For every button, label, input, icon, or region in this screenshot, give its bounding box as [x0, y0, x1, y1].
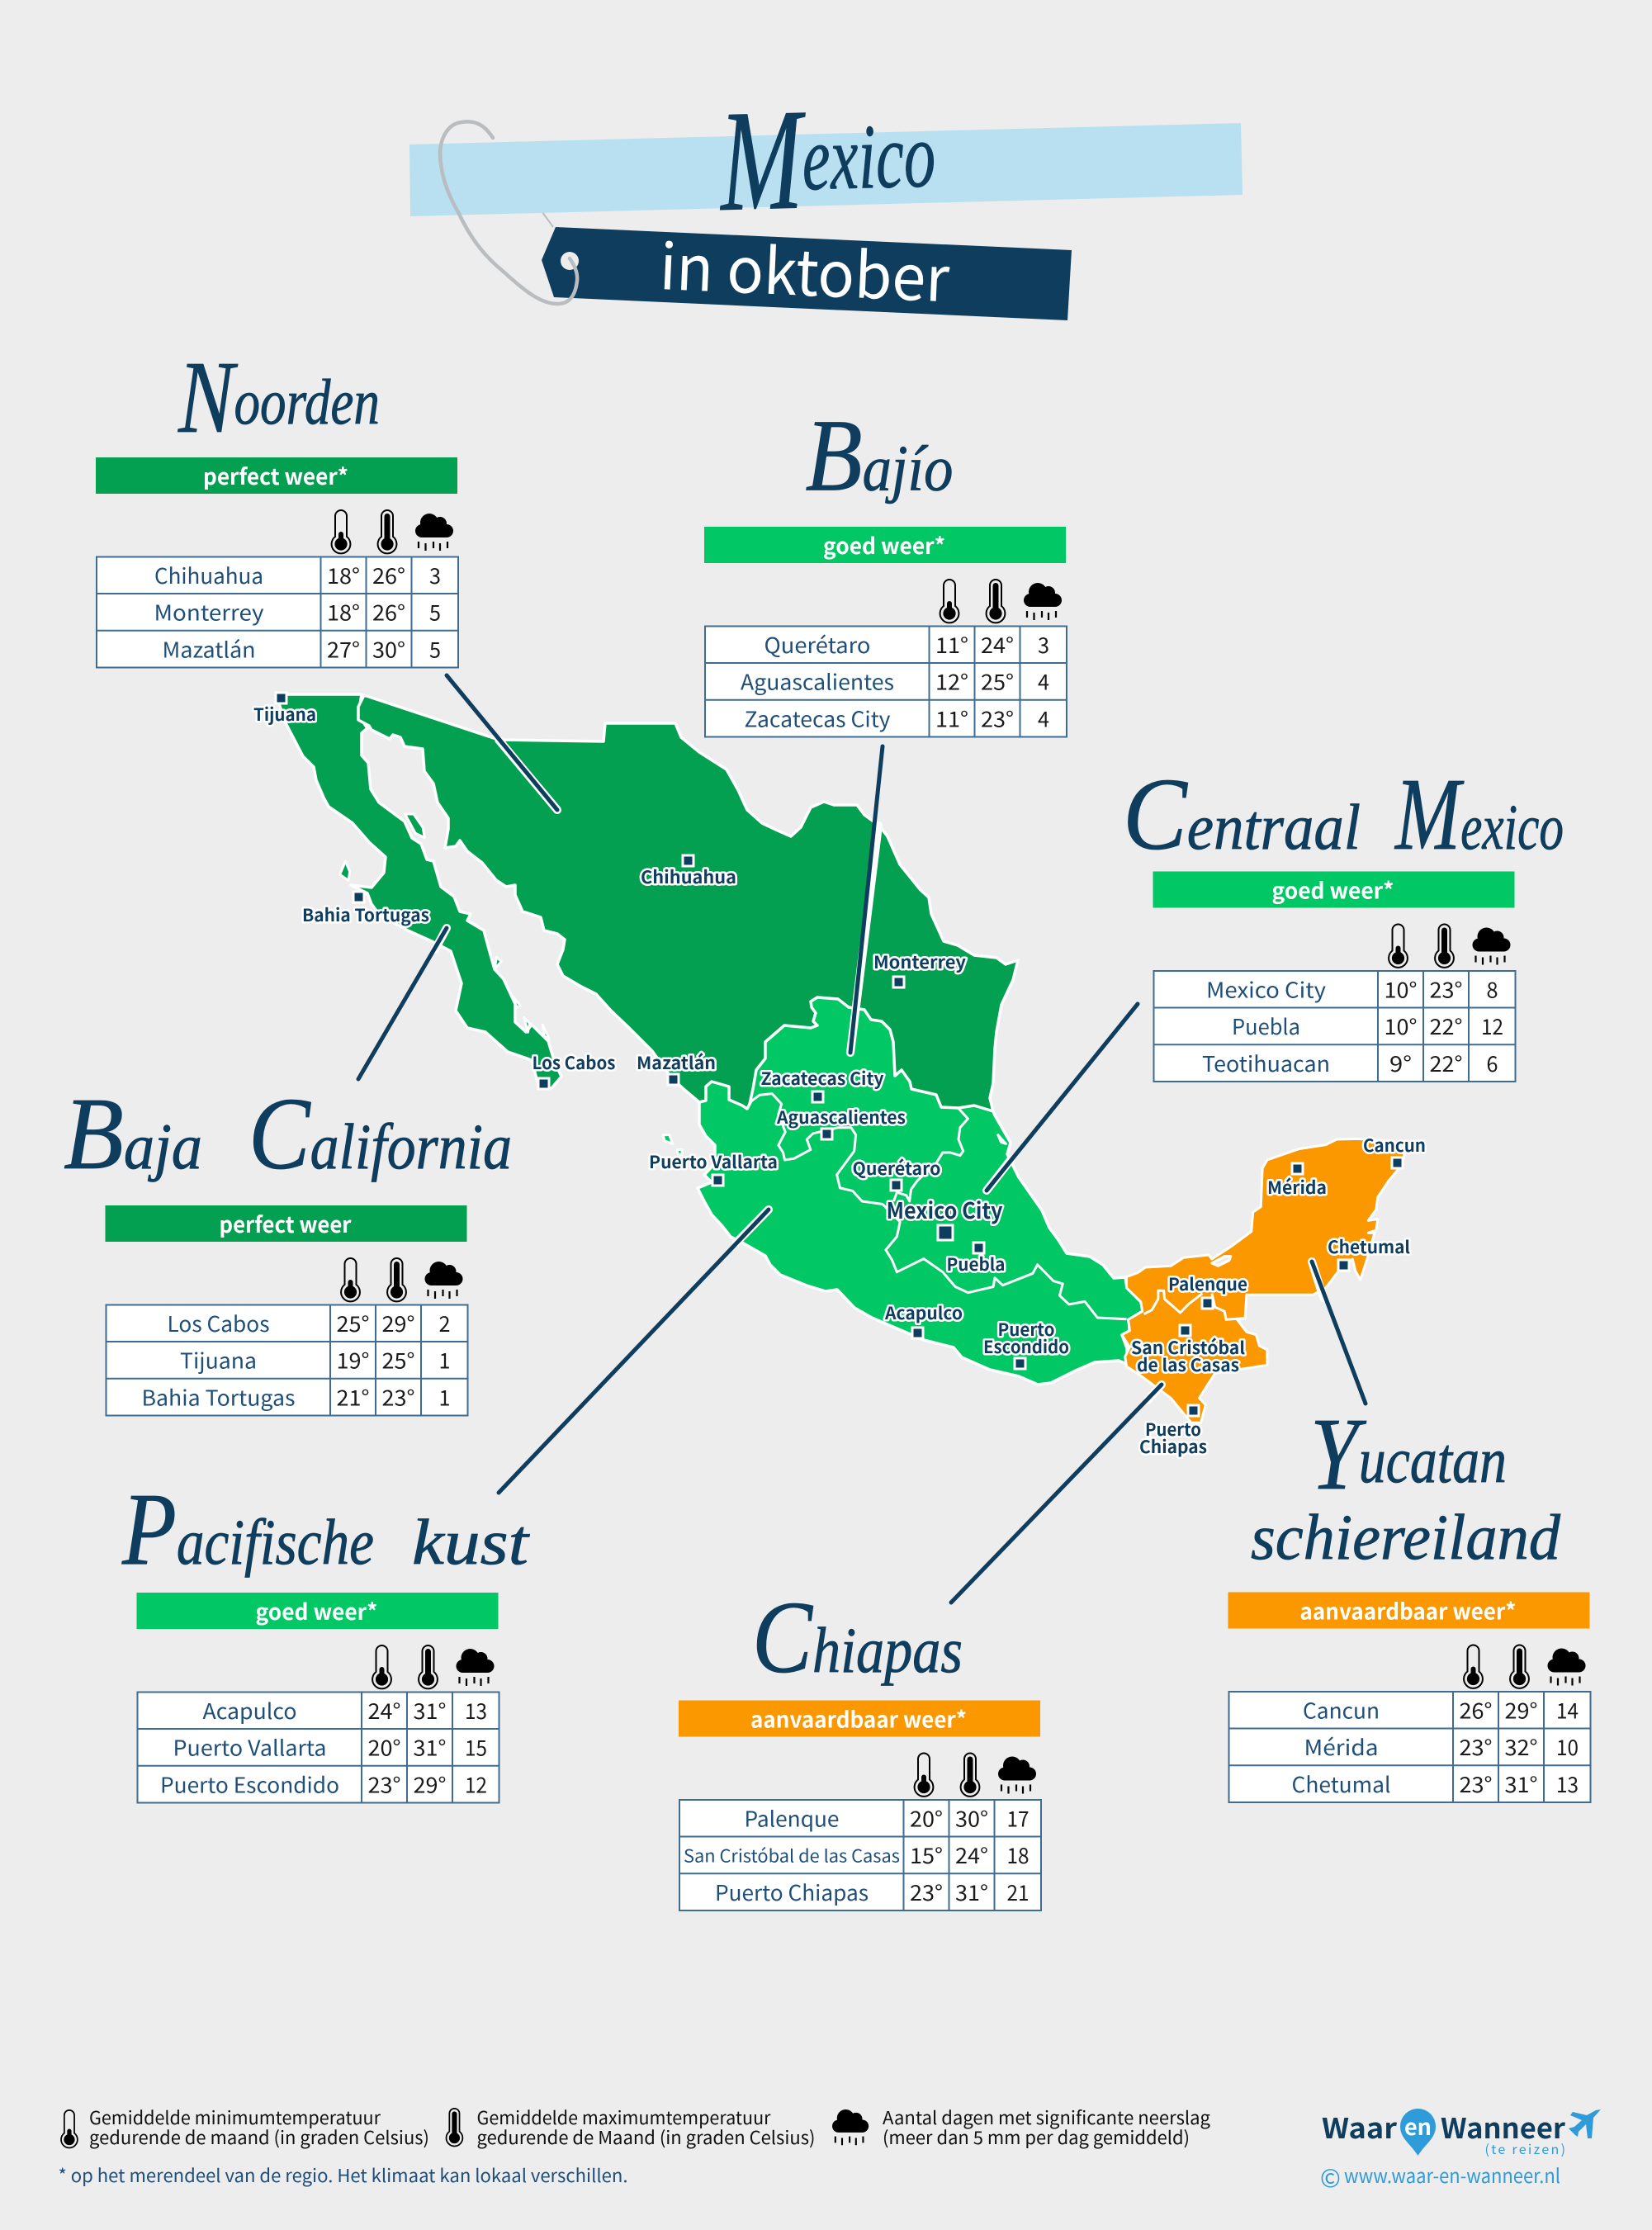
- region: Yucatan and Chiapas: [1122, 1139, 1404, 1423]
- climate table: 18°: [327, 597, 360, 627]
- climate table: San Cristóbal de las Casas: [684, 1843, 900, 1868]
- city: Puerto Chiapas: Chiapas: [1139, 1434, 1207, 1459]
- icons: [332, 510, 453, 553]
- weather banner: [704, 527, 1066, 563]
- heading: Pacifische kust: kust: [412, 1506, 531, 1578]
- city: Bahia Tortugas: Bahia Tortugas: [302, 902, 429, 927]
- climate table: 18°: [327, 560, 360, 590]
- climate table: Acapulco: [203, 1695, 297, 1726]
- legend: [58, 2104, 1211, 2188]
- climate table: Los Cabos: [167, 1308, 269, 1338]
- climate table: 21°: [337, 1381, 370, 1412]
- climate table: [106, 1304, 467, 1415]
- heading: Bajio: Bajío: [806, 400, 953, 514]
- icons: [940, 580, 1062, 623]
- climate table: [137, 1693, 499, 1803]
- title: Mexico: exico: [801, 104, 937, 210]
- climate table: 29°: [1504, 1694, 1537, 1726]
- climate table: [679, 1800, 1041, 1910]
- pin text: en: en: [1404, 2109, 1432, 2142]
- heading: Baja California: California: [249, 1077, 512, 1191]
- weather banner: goed weer*: [1271, 874, 1394, 905]
- climate table: 3: [429, 560, 441, 590]
- map of Mexico: [279, 694, 1404, 1423]
- panel: Noorden: [96, 341, 458, 667]
- city: Queretaro: Querétaro: [852, 1156, 941, 1181]
- legend text: rain days: (meer dan 5 mm per dag gemiddeld): [883, 2123, 1190, 2150]
- city: Monterrey: Monterrey: [873, 949, 966, 974]
- icons: [1464, 1645, 1585, 1688]
- climate table: 13: [1556, 1768, 1579, 1799]
- heading: Centraal Mexico: Centraal: [1123, 758, 1361, 872]
- arrow: Yucatan: [1312, 1262, 1366, 1404]
- climate table: 31°: [1504, 1768, 1537, 1799]
- website: [1320, 2158, 1560, 2194]
- website: www.waar-en-wanneer.nl: [1344, 2160, 1560, 2189]
- icons: [915, 1754, 1036, 1797]
- panel: Baja California: [64, 1077, 512, 1415]
- logo: Waar en Wanneer: [1320, 2106, 1601, 2194]
- city: Mazatlan: Mazatlán: [637, 1050, 716, 1075]
- climate table: Mazatlán: [162, 633, 256, 664]
- climate table: Puerto Chiapas: [715, 1877, 869, 1907]
- region: Noorden (Baja California peninsula): [279, 694, 561, 1088]
- climate table: Bahia Tortugas: [142, 1381, 296, 1412]
- city: Puerto Vallarta: Puerto Vallarta: [649, 1149, 778, 1174]
- climate table: Palenque: [745, 1803, 839, 1833]
- subtitle: in oktober: in oktober: [658, 216, 952, 320]
- inner region borders: [663, 1094, 1127, 1319]
- panel: Centraal Mexico: [1123, 758, 1564, 1082]
- climate table: 14: [1556, 1694, 1579, 1726]
- heading: Yucatan schiereiland: Y: [1310, 1398, 1366, 1512]
- heading: Pacifische kust: Pacifische: [121, 1473, 374, 1587]
- website: ©: [1320, 2158, 1341, 2194]
- weather banner: goed weer*: [823, 528, 945, 561]
- arrow: Bajio: [850, 746, 883, 1053]
- climate table: 3: [1038, 629, 1049, 660]
- city: Palenque: [1168, 1271, 1247, 1309]
- weather banner: perfect weer*: [203, 459, 348, 491]
- tag hole: [561, 252, 579, 270]
- climate table: 23°: [981, 703, 1014, 733]
- climate table: 4: [1038, 666, 1049, 697]
- city: Monterrey: [873, 949, 966, 987]
- icon: plane: [1569, 2109, 1601, 2138]
- panel: Pacifische kust: [121, 1473, 531, 1803]
- city: Bahia Tortugas: [302, 892, 429, 927]
- city: Mexico City: Mexico City: [887, 1193, 1003, 1225]
- climate table: 27°: [327, 633, 360, 664]
- climate table: Puebla: [1232, 1011, 1300, 1041]
- tag: [542, 227, 1072, 320]
- climate table: Tijuana: [180, 1345, 257, 1375]
- climate table: Chihuahua: [154, 560, 263, 590]
- climate table: 13: [465, 1695, 487, 1726]
- city: Cancun: [1363, 1133, 1426, 1168]
- weather banner: perfect weer: [220, 1207, 352, 1239]
- weather banner: goed weer*: [256, 1594, 378, 1626]
- city: Chihuahua: Chihuahua: [641, 864, 736, 889]
- climate table: Puerto Escondido: [160, 1768, 339, 1799]
- climate table: 22°: [1430, 1011, 1463, 1041]
- climate table: 10°: [1384, 974, 1417, 1004]
- heading: Centraal Mexico: [1123, 758, 1564, 872]
- climate table: [1154, 971, 1516, 1082]
- climate table: 6: [1486, 1048, 1498, 1078]
- climate table: 8: [1486, 974, 1498, 1004]
- city: Cancun: Cancun: [1363, 1133, 1426, 1158]
- climate table: 5: [429, 633, 441, 664]
- heading: Noorden: oorden: [234, 366, 380, 438]
- legend text: minimum temperature: gedurende de maand (in graden Celsius): [89, 2123, 429, 2150]
- title block: [409, 75, 1243, 320]
- tagline: (te reizen): [1484, 2138, 1565, 2158]
- climate table: 23°: [1430, 974, 1463, 1004]
- climate table: 18: [1007, 1839, 1029, 1870]
- title band: [409, 123, 1243, 216]
- heading: Yucatan schiereiland: ucatan: [1359, 1424, 1507, 1496]
- climate table: 23°: [1460, 1768, 1493, 1799]
- tag thread: [542, 212, 553, 227]
- climate table: 9°: [1389, 1048, 1412, 1078]
- climate table: 31°: [955, 1877, 988, 1907]
- climate table: 23°: [910, 1877, 943, 1907]
- city: Puerto Chiapas: Puerto: [1145, 1417, 1201, 1442]
- climate table: 30°: [955, 1803, 988, 1833]
- climate table: 22°: [1430, 1048, 1463, 1078]
- climate table: 23°: [368, 1768, 401, 1799]
- arrow: Baja California: [358, 928, 447, 1079]
- climate table: 15: [465, 1732, 487, 1763]
- city: Zacatecas City: Zacatecas City: [761, 1066, 883, 1091]
- climate table: Puerto Vallarta: [173, 1732, 327, 1763]
- icons: [341, 1258, 462, 1301]
- climate table: [1228, 1692, 1590, 1802]
- heading: Yucatan schiereiland: schiereiland: [1251, 1501, 1561, 1573]
- region: Noorden (mainland): [358, 695, 1018, 1111]
- heading: Centraal Mexico: Mexico: [1394, 758, 1564, 872]
- heading: Baja California: Baja: [64, 1077, 202, 1191]
- climate table: 10°: [1384, 1011, 1417, 1041]
- weather banner: [1228, 1592, 1590, 1628]
- climate table: 23°: [1460, 1731, 1493, 1762]
- climate table: 29°: [413, 1768, 446, 1799]
- climate table: Mexico City: [1206, 974, 1326, 1004]
- climate table: 1: [439, 1381, 451, 1412]
- climate table: [97, 556, 458, 667]
- climate table: 25°: [981, 666, 1014, 697]
- weather banner: aanvaardbaar weer*: [750, 1702, 967, 1734]
- heading: Noorden: N: [178, 341, 239, 455]
- city: San Cristobal de las Casas: [1131, 1325, 1245, 1377]
- region: Pacific coast, Bajio and central Mexico: [698, 997, 1143, 1385]
- city labels on the map: [253, 693, 1426, 1459]
- climate table: 2: [439, 1308, 451, 1338]
- legend text: minimum temperature: Gemiddelde minimumtemperatuur: [89, 2104, 381, 2130]
- climate table: Aguascalientes: [741, 666, 894, 697]
- climate table: 10: [1556, 1731, 1579, 1762]
- climate table: [705, 626, 1067, 736]
- climate table: 24°: [368, 1695, 401, 1726]
- weather banner: [679, 1701, 1040, 1737]
- panel: Yucatan schiereiland: [1228, 1398, 1590, 1802]
- legend text: rain days: [883, 2104, 1211, 2150]
- city: Merida: [1267, 1163, 1327, 1200]
- city: Acapulco: [884, 1300, 963, 1338]
- arrow: Chiapas: [951, 1385, 1162, 1603]
- climate table: 25°: [337, 1308, 370, 1338]
- city: Puerto Escondido: [983, 1317, 1069, 1369]
- climate table: Mérida: [1304, 1731, 1379, 1762]
- climate table: Chetumal: [1291, 1768, 1390, 1799]
- climate table: 20°: [910, 1803, 943, 1833]
- climate table: 15°: [910, 1839, 943, 1870]
- climate table: 24°: [981, 629, 1014, 660]
- city: Los Cabos: Los Cabos: [532, 1050, 616, 1075]
- climate table: 12: [1481, 1011, 1503, 1041]
- climate table: 23°: [381, 1381, 414, 1412]
- icon: minimum temperature: [61, 2110, 78, 2147]
- weather banner: [106, 1205, 467, 1242]
- climate table: 11°: [935, 629, 968, 660]
- city: Tijuana: Tijuana: [253, 702, 316, 727]
- arrow: Noorden: [447, 675, 557, 810]
- climate table: 17: [1007, 1803, 1029, 1833]
- city: Puerto Vallarta: [649, 1149, 778, 1186]
- icon: maximum temperature: [447, 2109, 462, 2146]
- climate table: 26°: [372, 560, 405, 590]
- city: San Cristobal de las Casas: San Cristóbal: [1131, 1335, 1245, 1360]
- climate table: Teotihuacan: [1202, 1048, 1330, 1078]
- climate table: Zacatecas City: [745, 703, 891, 733]
- city: Puerto Escondido: Puerto: [997, 1317, 1055, 1342]
- climate table: 4: [1038, 703, 1049, 733]
- climate table: 31°: [413, 1695, 446, 1726]
- city: Mexico City: [887, 1193, 1003, 1240]
- climate table: 26°: [1460, 1694, 1493, 1726]
- climate table: 11°: [935, 703, 968, 733]
- footnote: * op het merendeel van de regio. Het klimaat kan lokaal verschillen.: [58, 2161, 627, 2188]
- climate table: 1: [439, 1345, 451, 1375]
- weather banner: [137, 1593, 499, 1629]
- icons: [1389, 925, 1511, 968]
- city: Merida: Mérida: [1267, 1175, 1327, 1200]
- legend text: maximum temperature: gedurende de Maand (in graden Celsius): [477, 2123, 816, 2150]
- weather banner: [1153, 872, 1514, 908]
- islands in the north: [340, 814, 549, 1038]
- city: Aguascalientes: Aguascalientes: [776, 1105, 906, 1129]
- title: Mexico: M: [716, 78, 809, 241]
- heading: Yucatan schiereiland: [1251, 1398, 1561, 1573]
- arrow: Centraal Mexico: [987, 1004, 1138, 1191]
- city: Chetumal: Chetumal: [1328, 1234, 1410, 1259]
- wordmark: Wanneer: Wanneer: [1441, 2106, 1565, 2147]
- climate table: 19°: [337, 1345, 370, 1375]
- heading: Chiapas: Chiapas: [752, 1581, 963, 1695]
- icon: rain days: [832, 2109, 869, 2145]
- climate table: 25°: [381, 1345, 414, 1375]
- city: Puebla: Puebla: [946, 1252, 1006, 1276]
- legend text: maximum temperature: [477, 2104, 816, 2150]
- climate table: Querétaro: [764, 629, 870, 660]
- icon: map pin: [1400, 2109, 1436, 2156]
- city: Los Cabos: [532, 1050, 616, 1089]
- legend text: rain days: Aantal dagen met significante neerslag: [883, 2104, 1211, 2130]
- heading: Pacifische kust: [121, 1473, 531, 1587]
- city: Puerto Chiapas: [1139, 1405, 1207, 1459]
- city: Chetumal: [1328, 1234, 1410, 1271]
- city: Zacatecas City: [761, 1066, 883, 1102]
- icons: [372, 1645, 494, 1688]
- city: Mazatlan: [637, 1050, 716, 1085]
- panel: Bajio: [704, 400, 1067, 736]
- legend text: maximum temperature: Gemiddelde maximumtemperatuur: [477, 2104, 771, 2130]
- climate table: 30°: [372, 633, 405, 664]
- arrow: Pacifische kust: [499, 1210, 769, 1493]
- climate table: 29°: [381, 1308, 414, 1338]
- climate table: 12°: [935, 666, 968, 697]
- string loop: [440, 121, 577, 304]
- climate table: 32°: [1504, 1731, 1537, 1762]
- climate table: 26°: [372, 597, 405, 627]
- city: Puerto Escondido: Escondido: [983, 1334, 1069, 1359]
- city: San Cristobal de las Casas: de las Casas: [1137, 1352, 1239, 1377]
- climate table: 31°: [413, 1732, 446, 1763]
- panel: Chiapas: [679, 1581, 1041, 1910]
- city: Acapulco: Acapulco: [884, 1300, 963, 1325]
- climate table: 24°: [955, 1839, 988, 1870]
- climate table: Monterrey: [154, 597, 264, 627]
- climate table: 20°: [368, 1732, 401, 1763]
- legend text: minimum temperature: [89, 2104, 429, 2150]
- wordmark: Waar: Waar: [1322, 2106, 1397, 2147]
- city: Palenque: Palenque: [1168, 1271, 1247, 1296]
- climate table: 12: [465, 1768, 487, 1799]
- climate table: 21: [1007, 1877, 1029, 1907]
- climate table: Cancun: [1303, 1694, 1380, 1726]
- climate table: 5: [429, 597, 441, 627]
- weather banner: [96, 457, 457, 494]
- weather banner: aanvaardbaar weer*: [1299, 1593, 1516, 1626]
- heading: Baja California: [64, 1077, 512, 1191]
